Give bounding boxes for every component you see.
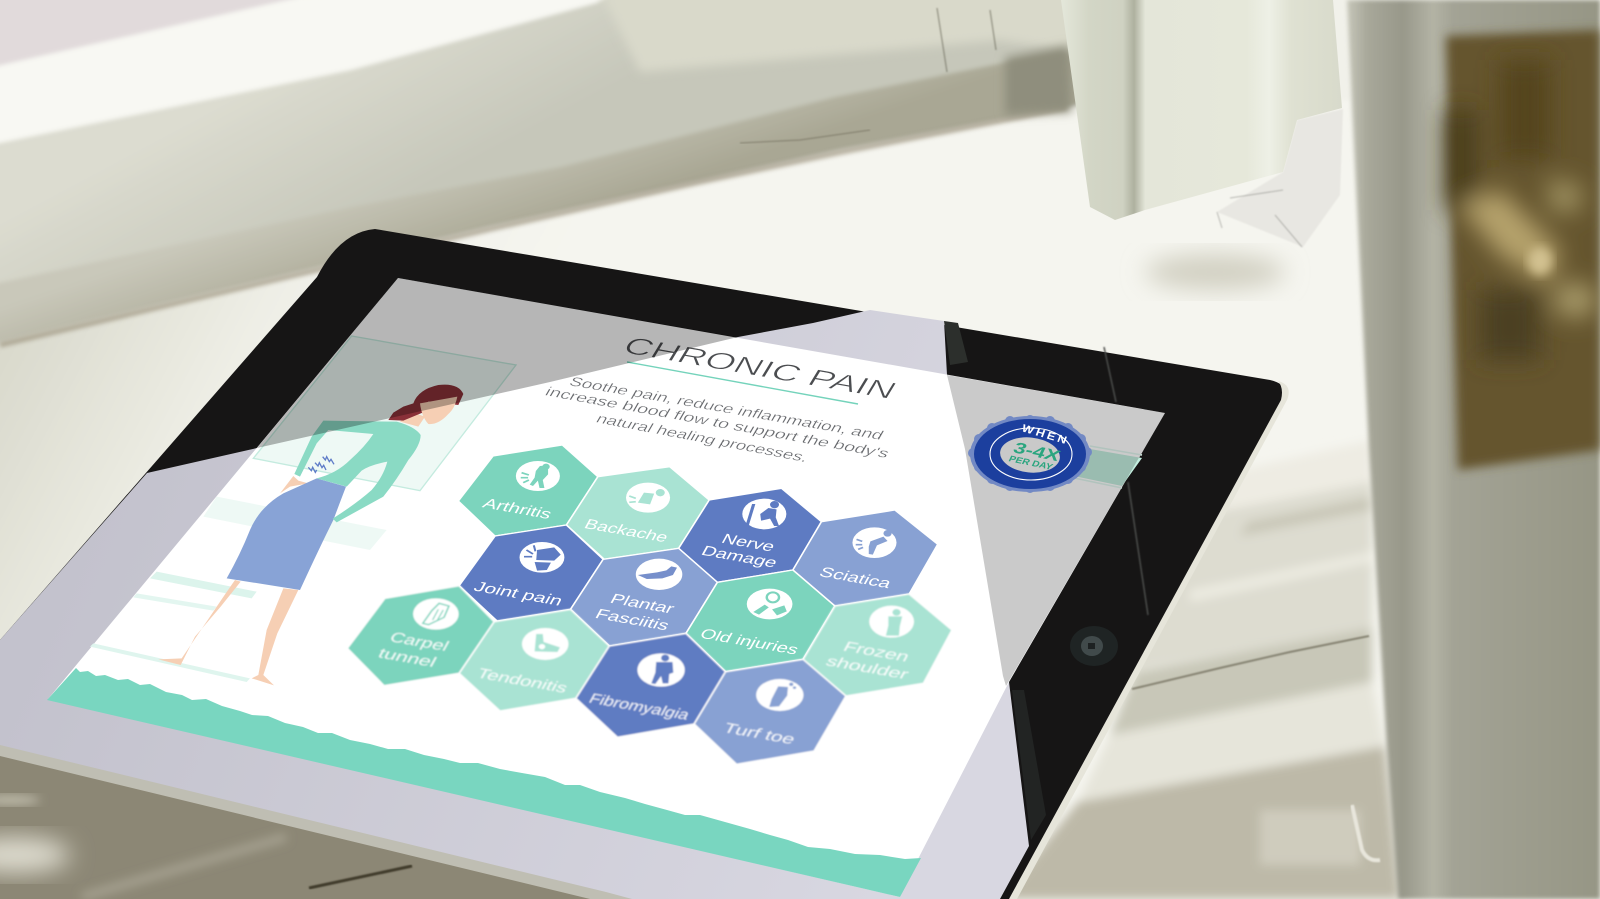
sill shadow under trim — [1145, 254, 1285, 290]
tablet screen — [47, 278, 1165, 897]
hex: Carpel tunnel — [347, 586, 494, 686]
dim reflection over right of screen — [947, 375, 1165, 686]
wavy teal ground band — [47, 668, 921, 897]
hex: Plantar Fasciitis — [571, 548, 717, 646]
pain zigzags — [308, 457, 334, 472]
intro paragraph — [542, 375, 892, 465]
background illustration: window and floor bands — [90, 336, 516, 682]
hexagon labels: lower rows: Turf toe — [720, 721, 798, 748]
skirt — [227, 478, 346, 590]
hex: Tendonitis — [459, 609, 609, 711]
tablet body — [0, 229, 1289, 899]
icon: tendonitis — [522, 628, 568, 660]
door frame — [1347, 0, 1600, 899]
hexagon labels: lower rows — [375, 630, 912, 748]
hexagon labels: lower rows: tunnel — [375, 646, 439, 670]
silver bottom edge — [0, 745, 632, 899]
icon: old injuries — [747, 589, 792, 619]
medal badge: when 3-4X per day: PER DAY — [1007, 454, 1054, 472]
hexagon labels: upper rows: Arthritis — [480, 496, 555, 522]
hex: Arthritis — [458, 445, 598, 536]
icon: backache — [626, 483, 670, 513]
hexagon labels: upper rows: Backache — [581, 517, 671, 546]
face — [420, 397, 457, 424]
icons: upper rows — [516, 461, 897, 619]
icon: carpal tunnel — [413, 598, 459, 630]
hex: Joint pain — [459, 525, 603, 621]
cracked paint patch — [1217, 109, 1343, 247]
hex: Turf toe — [694, 659, 846, 764]
hexagon grid: upper rows — [458, 445, 938, 672]
neck — [400, 412, 425, 427]
sweater and arms — [294, 421, 421, 522]
icon: frozen shoulder — [869, 606, 914, 638]
woman bending with back pain — [158, 385, 463, 685]
medal badge: when 3-4X per day: 3-4X — [1010, 440, 1063, 465]
hex: Old injuries — [686, 570, 835, 672]
icon: nerve damage — [742, 499, 786, 529]
intro paragraph: natural healing processes. — [593, 412, 811, 465]
hexagon labels: lower rows: Fibromyalgia — [586, 691, 693, 723]
hex: Sciatica — [793, 510, 938, 606]
reflected streaks — [1104, 347, 1148, 615]
icon: arthritis — [516, 461, 560, 491]
heading: Chronic Pain: CHRONIC PAIN — [618, 332, 902, 404]
hexagon labels: upper rows: Sciatica — [816, 565, 895, 592]
hair — [388, 385, 463, 421]
tablet black bezel — [0, 229, 1286, 899]
window trim column — [1061, 0, 1342, 220]
hexagon labels: lower rows: shoulder — [823, 654, 911, 683]
icon: turf toe footprint — [756, 679, 803, 711]
brass door latch — [1446, 30, 1600, 470]
hexagon labels: upper rows — [471, 496, 895, 658]
heading underline — [627, 362, 858, 404]
ribbon behind medal — [1074, 446, 1142, 488]
icon: plantar fasciitis — [636, 559, 682, 590]
hexagon labels: upper rows: Fasciitis — [592, 607, 672, 634]
icon: joint pain — [520, 542, 564, 573]
hex: Backache — [566, 467, 709, 559]
icon: fibromyalgia — [637, 653, 685, 687]
hexagon labels: lower rows: Carpel — [387, 630, 452, 654]
intro paragraph: increase blood flow to support the body's — [542, 385, 892, 461]
lavender reflection on bezel — [0, 310, 1029, 899]
intro paragraph: Soothe pain, reduce inflammation, and — [566, 375, 886, 443]
hexagon grid: lower blurred rows — [347, 586, 952, 764]
hands — [280, 476, 333, 544]
hexagon labels: upper rows: Joint pain — [471, 579, 565, 609]
hex: Frozen shoulder — [803, 594, 952, 696]
floor below tablet — [0, 745, 640, 899]
hexagon labels: upper rows: Nerve — [719, 531, 778, 555]
lower right mouldings — [1000, 440, 1400, 899]
legs — [158, 580, 298, 685]
hex: Fibromyalgia — [576, 633, 726, 737]
hexagon labels: upper rows: Damage — [698, 543, 780, 571]
hexagon labels: upper rows: Old injuries — [697, 626, 802, 658]
medal badge: when 3-4X per day: WHEN — [1020, 422, 1068, 446]
icons: lower rows — [413, 598, 914, 711]
grime along the sill joint — [0, 108, 1067, 345]
silver tablet edge — [1009, 381, 1289, 899]
hex: Nerve Damage — [679, 488, 821, 582]
icon: sciatica — [852, 527, 897, 558]
home button — [1070, 626, 1118, 666]
medal badge: when 3-4X per day — [968, 415, 1092, 493]
hexagon labels: upper rows: Plantar — [607, 591, 677, 617]
hexagon labels: lower rows: Frozen — [840, 639, 912, 665]
dim reflection over upper-left of screen — [257, 278, 738, 448]
hexagon labels: lower rows: Tendonitis — [474, 666, 571, 696]
